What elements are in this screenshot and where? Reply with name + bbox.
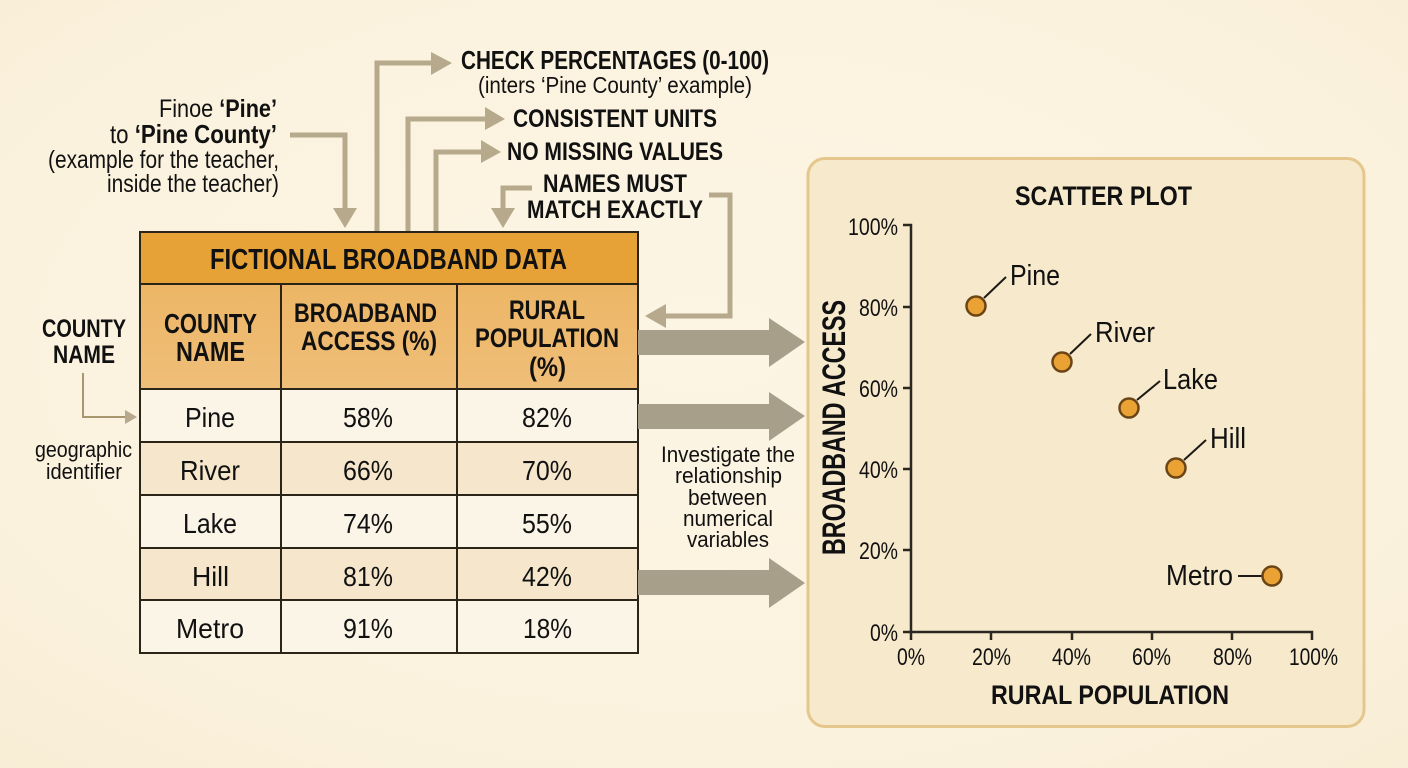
row: Hill: Hill <box>192 561 229 592</box>
y axis tick labels: 0% <box>870 620 898 647</box>
annotation: investigate the relationship: numerical <box>683 506 773 531</box>
scatter plot title: SCATTER PLOT <box>1015 181 1192 211</box>
row: Lake: Lake <box>183 508 237 539</box>
x axis tick labels <box>897 644 1338 671</box>
row: Hill: 42% <box>522 561 572 592</box>
data point: Pine <box>966 260 1060 316</box>
arrow: to check percentages <box>377 52 452 232</box>
table header row <box>140 284 638 389</box>
y axis title: BROADBAND ACCESS <box>816 300 852 555</box>
row: River <box>140 442 638 495</box>
arrow: names must match to rural population column <box>645 195 730 328</box>
arrow: table to scatter plot, bottom <box>638 558 805 608</box>
arrow: to no missing values <box>436 140 501 232</box>
checklist heading: consistent units: CONSISTENT UNITS <box>513 105 717 133</box>
row: Metro <box>140 600 638 653</box>
arrow: county name to Pine row <box>83 373 137 424</box>
annotation: Pine rename example <box>48 95 279 198</box>
table header row: RURAL <box>509 295 585 325</box>
annotation: county name: COUNTY <box>42 315 126 343</box>
table: fictional broadband data <box>140 232 638 653</box>
data point: Hill <box>1166 423 1246 478</box>
row: Lake: 74% <box>343 508 393 539</box>
x axis tick labels: 40% <box>1052 644 1091 671</box>
data point: Metro <box>1166 560 1282 592</box>
table title bar: FICTIONAL BROADBAND DATA <box>210 244 567 276</box>
annotation: Pine rename example: to ‘Pine County’ <box>110 119 277 149</box>
table header row: NAME <box>176 336 245 367</box>
annotation: Pine rename example: Finoe ‘Pine’ <box>159 95 277 123</box>
data point: Pine: Pine <box>1010 260 1060 292</box>
data point: Metro: Metro <box>1166 560 1233 592</box>
y axis tick labels: 60% <box>859 376 898 403</box>
row: River: River <box>180 455 240 486</box>
data point: Hill: Hill <box>1210 423 1246 455</box>
annotation: investigate the relationship: between <box>688 485 767 510</box>
row: Pine: 58% <box>343 402 393 433</box>
data point: Lake <box>1120 364 1218 418</box>
row: Lake <box>140 495 638 548</box>
checklist heading: check percentages <box>461 45 769 98</box>
row: Pine: Pine <box>185 402 235 433</box>
checklist heading: names must match exactly: NAMES MUST <box>543 170 687 198</box>
table header row: BROADBAND <box>294 298 437 328</box>
x axis tick labels: 100% <box>1289 644 1338 671</box>
table title bar <box>140 232 638 284</box>
row: Metro: 18% <box>523 613 572 644</box>
data point: River: River <box>1095 317 1155 349</box>
annotation: investigate the relationship: Investigate the <box>661 442 795 467</box>
x axis tick labels: 80% <box>1213 644 1252 671</box>
row: Pine <box>140 389 638 442</box>
annotation: investigate the relationship <box>661 442 795 552</box>
row: Metro: 91% <box>343 613 393 644</box>
row: Metro: Metro <box>176 613 244 644</box>
checklist heading: no missing values: NO MISSING VALUES <box>507 138 723 166</box>
checklist heading: check percentages: CHECK PERCENTAGES (0-100) <box>461 45 769 75</box>
row: Hill: 81% <box>343 561 393 592</box>
annotation: Pine rename example: inside the teacher) <box>107 170 279 198</box>
panel: scatter plot <box>808 158 1364 726</box>
y axis tick labels: 40% <box>859 457 898 484</box>
annotation: investigate the relationship: relationship <box>675 463 782 488</box>
row: Hill <box>140 548 638 600</box>
annotation: geographic identifier <box>35 437 132 484</box>
arrow: table to scatter plot, middle <box>638 392 805 441</box>
x axis tick labels: 0% <box>897 644 925 671</box>
annotation: investigate the relationship: variables <box>687 527 769 552</box>
table header row: POPULATION <box>475 323 619 353</box>
y axis tick labels <box>848 214 898 647</box>
table header row: COUNTY <box>164 308 257 339</box>
x axis tick labels: 20% <box>972 644 1011 671</box>
arrow: Pine example to table <box>290 135 357 228</box>
x axis title: RURAL POPULATION <box>991 680 1229 710</box>
checklist heading: check percentages: (inters ‘Pine County’ example) <box>478 72 752 98</box>
data point: River <box>1052 317 1155 372</box>
annotation: Pine rename example: (example for the teacher, <box>48 146 279 174</box>
checklist heading: names must match exactly <box>527 170 703 224</box>
annotation: county name <box>42 315 126 369</box>
row: Lake: 55% <box>522 508 572 539</box>
row: River: 66% <box>343 455 393 486</box>
annotation: county name: NAME <box>53 341 115 369</box>
y axis tick labels: 100% <box>848 214 898 241</box>
row: Pine: 82% <box>522 402 572 433</box>
y axis tick labels: 20% <box>859 538 898 565</box>
data point: Lake: Lake <box>1163 364 1218 396</box>
table header row: ACCESS (%) <box>301 326 437 356</box>
arrow: table to scatter plot, top <box>638 318 805 367</box>
arrow: to consistent units <box>408 107 505 232</box>
arrow: names must match to table <box>491 188 532 228</box>
y axis tick labels: 80% <box>859 295 898 322</box>
row: River: 70% <box>522 455 572 486</box>
x axis tick labels: 60% <box>1132 644 1171 671</box>
table header row: (%) <box>529 352 566 382</box>
axes <box>903 225 1312 640</box>
annotation: geographic identifier: geographic <box>35 437 132 462</box>
annotation: geographic identifier: identifier <box>46 459 122 484</box>
checklist heading: names must match exactly: MATCH EXACTLY <box>527 196 703 224</box>
